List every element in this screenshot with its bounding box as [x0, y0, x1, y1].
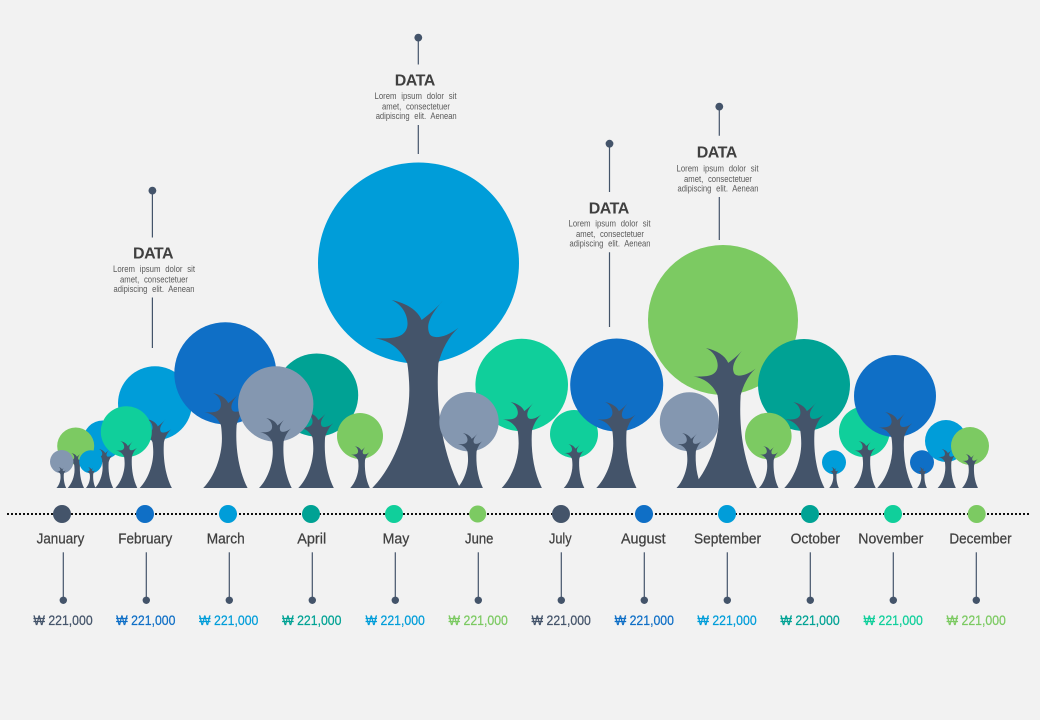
timeline: December: December: [949, 530, 1012, 548]
timeline: August: August: [621, 530, 666, 548]
callout: middle DATA: [568, 140, 651, 327]
tree: gray medium: [660, 392, 719, 488]
callout: middle DATA: amet, consectetuer: [576, 229, 644, 239]
callout: top DATA: Lorem ipsum dolor sit: [374, 91, 457, 101]
timeline: January: ₩ 221,000: [33, 612, 93, 628]
timeline: September: September: [694, 530, 761, 548]
timeline: June: June: [465, 530, 493, 548]
timeline dotted line: [7, 513, 1029, 515]
tree: teal medium: [275, 354, 358, 488]
callout: right DATA: adipiscing elit. Aenean: [678, 184, 758, 194]
tree: green small: [951, 427, 989, 488]
timeline: September: ₩ 221,000: [697, 612, 757, 628]
tree: big green: [648, 245, 798, 488]
callout: left DATA: adipiscing elit. Aenean: [114, 284, 194, 294]
tree: dark blue medium: [854, 355, 936, 488]
tree: dark blue large: [570, 338, 663, 488]
tree: blue small: [925, 420, 967, 488]
tree: giant blue: [318, 162, 519, 488]
callout: middle DATA: Lorem ipsum dolor sit: [568, 219, 651, 229]
timeline: June: [449, 506, 508, 628]
timeline: April: [282, 505, 342, 628]
timeline: February: [116, 505, 176, 628]
callout: left DATA: Lorem ipsum dolor sit: [113, 264, 195, 274]
timeline: February: ₩ 221,000: [116, 612, 176, 628]
timeline: May: May: [383, 530, 410, 548]
timeline: October: October: [791, 530, 840, 548]
tree: green small: [337, 413, 383, 488]
callout: right DATA: [676, 103, 759, 240]
tree: gray medium: [439, 392, 499, 488]
timeline: February: February: [118, 530, 173, 548]
timeline: November: ₩ 221,000: [864, 612, 923, 628]
timeline: October: ₩ 221,000: [780, 612, 840, 628]
tree: mint large: [475, 339, 568, 488]
tree: teal large: [758, 339, 850, 488]
callout: left DATA: [113, 187, 195, 348]
callout: top DATA: [374, 34, 457, 154]
callout: top DATA: DATA: [395, 73, 436, 90]
tree: green small: [57, 428, 94, 488]
tree: mint small: [550, 410, 598, 488]
timeline: May: ₩ 221,000: [366, 612, 425, 628]
timeline: January: [33, 505, 93, 628]
callout: right DATA: amet, consectetuer: [684, 174, 752, 184]
timeline: August: ₩ 221,000: [615, 612, 674, 628]
callout: top DATA: adipiscing elit. Aenean: [376, 111, 457, 121]
tree: blue small: [83, 420, 122, 488]
timeline: March: [199, 505, 259, 628]
timeline: November: [858, 505, 923, 628]
callout: right DATA: DATA: [697, 144, 738, 161]
callout: left DATA: amet, consectetuer: [120, 274, 188, 284]
timeline: December: [947, 505, 1012, 628]
timeline: January: January: [37, 530, 85, 548]
tree: gray tiny: [50, 450, 73, 488]
tree: mint small: [101, 406, 152, 488]
tree: gray medium: [238, 366, 313, 488]
forest of trees: [50, 162, 989, 488]
tree: blue tiny: [79, 450, 102, 488]
callout: top DATA: amet, consectetuer: [382, 101, 450, 111]
tree: blue tiny: [822, 450, 846, 488]
timeline: July: [532, 505, 591, 628]
callout: left DATA: DATA: [133, 246, 174, 263]
timeline: March: March: [207, 530, 245, 548]
timeline: November: November: [858, 530, 923, 548]
timeline: September: [694, 505, 761, 628]
timeline: July: July: [549, 530, 572, 548]
callout: right DATA: Lorem ipsum dolor sit: [676, 164, 759, 174]
tree: blue medium, left: [118, 366, 192, 488]
callout: middle DATA: adipiscing elit. Aenean: [570, 239, 650, 249]
callout: middle DATA: DATA: [589, 200, 630, 217]
timeline: December: ₩ 221,000: [947, 612, 1006, 628]
timeline: June: ₩ 221,000: [449, 612, 508, 628]
tree: mint small: [839, 406, 890, 488]
timeline: October: [780, 505, 840, 628]
tree: green small: [745, 413, 792, 488]
timeline: April: ₩ 221,000: [282, 612, 342, 628]
timeline: August: [615, 505, 674, 628]
tree: dark blue large: [174, 322, 276, 488]
timeline: July: ₩ 221,000: [532, 612, 591, 628]
timeline: April: April: [297, 530, 326, 548]
timeline: May: [366, 505, 425, 628]
tree: dark blue tiny: [910, 450, 934, 488]
timeline: March: ₩ 221,000: [199, 612, 259, 628]
